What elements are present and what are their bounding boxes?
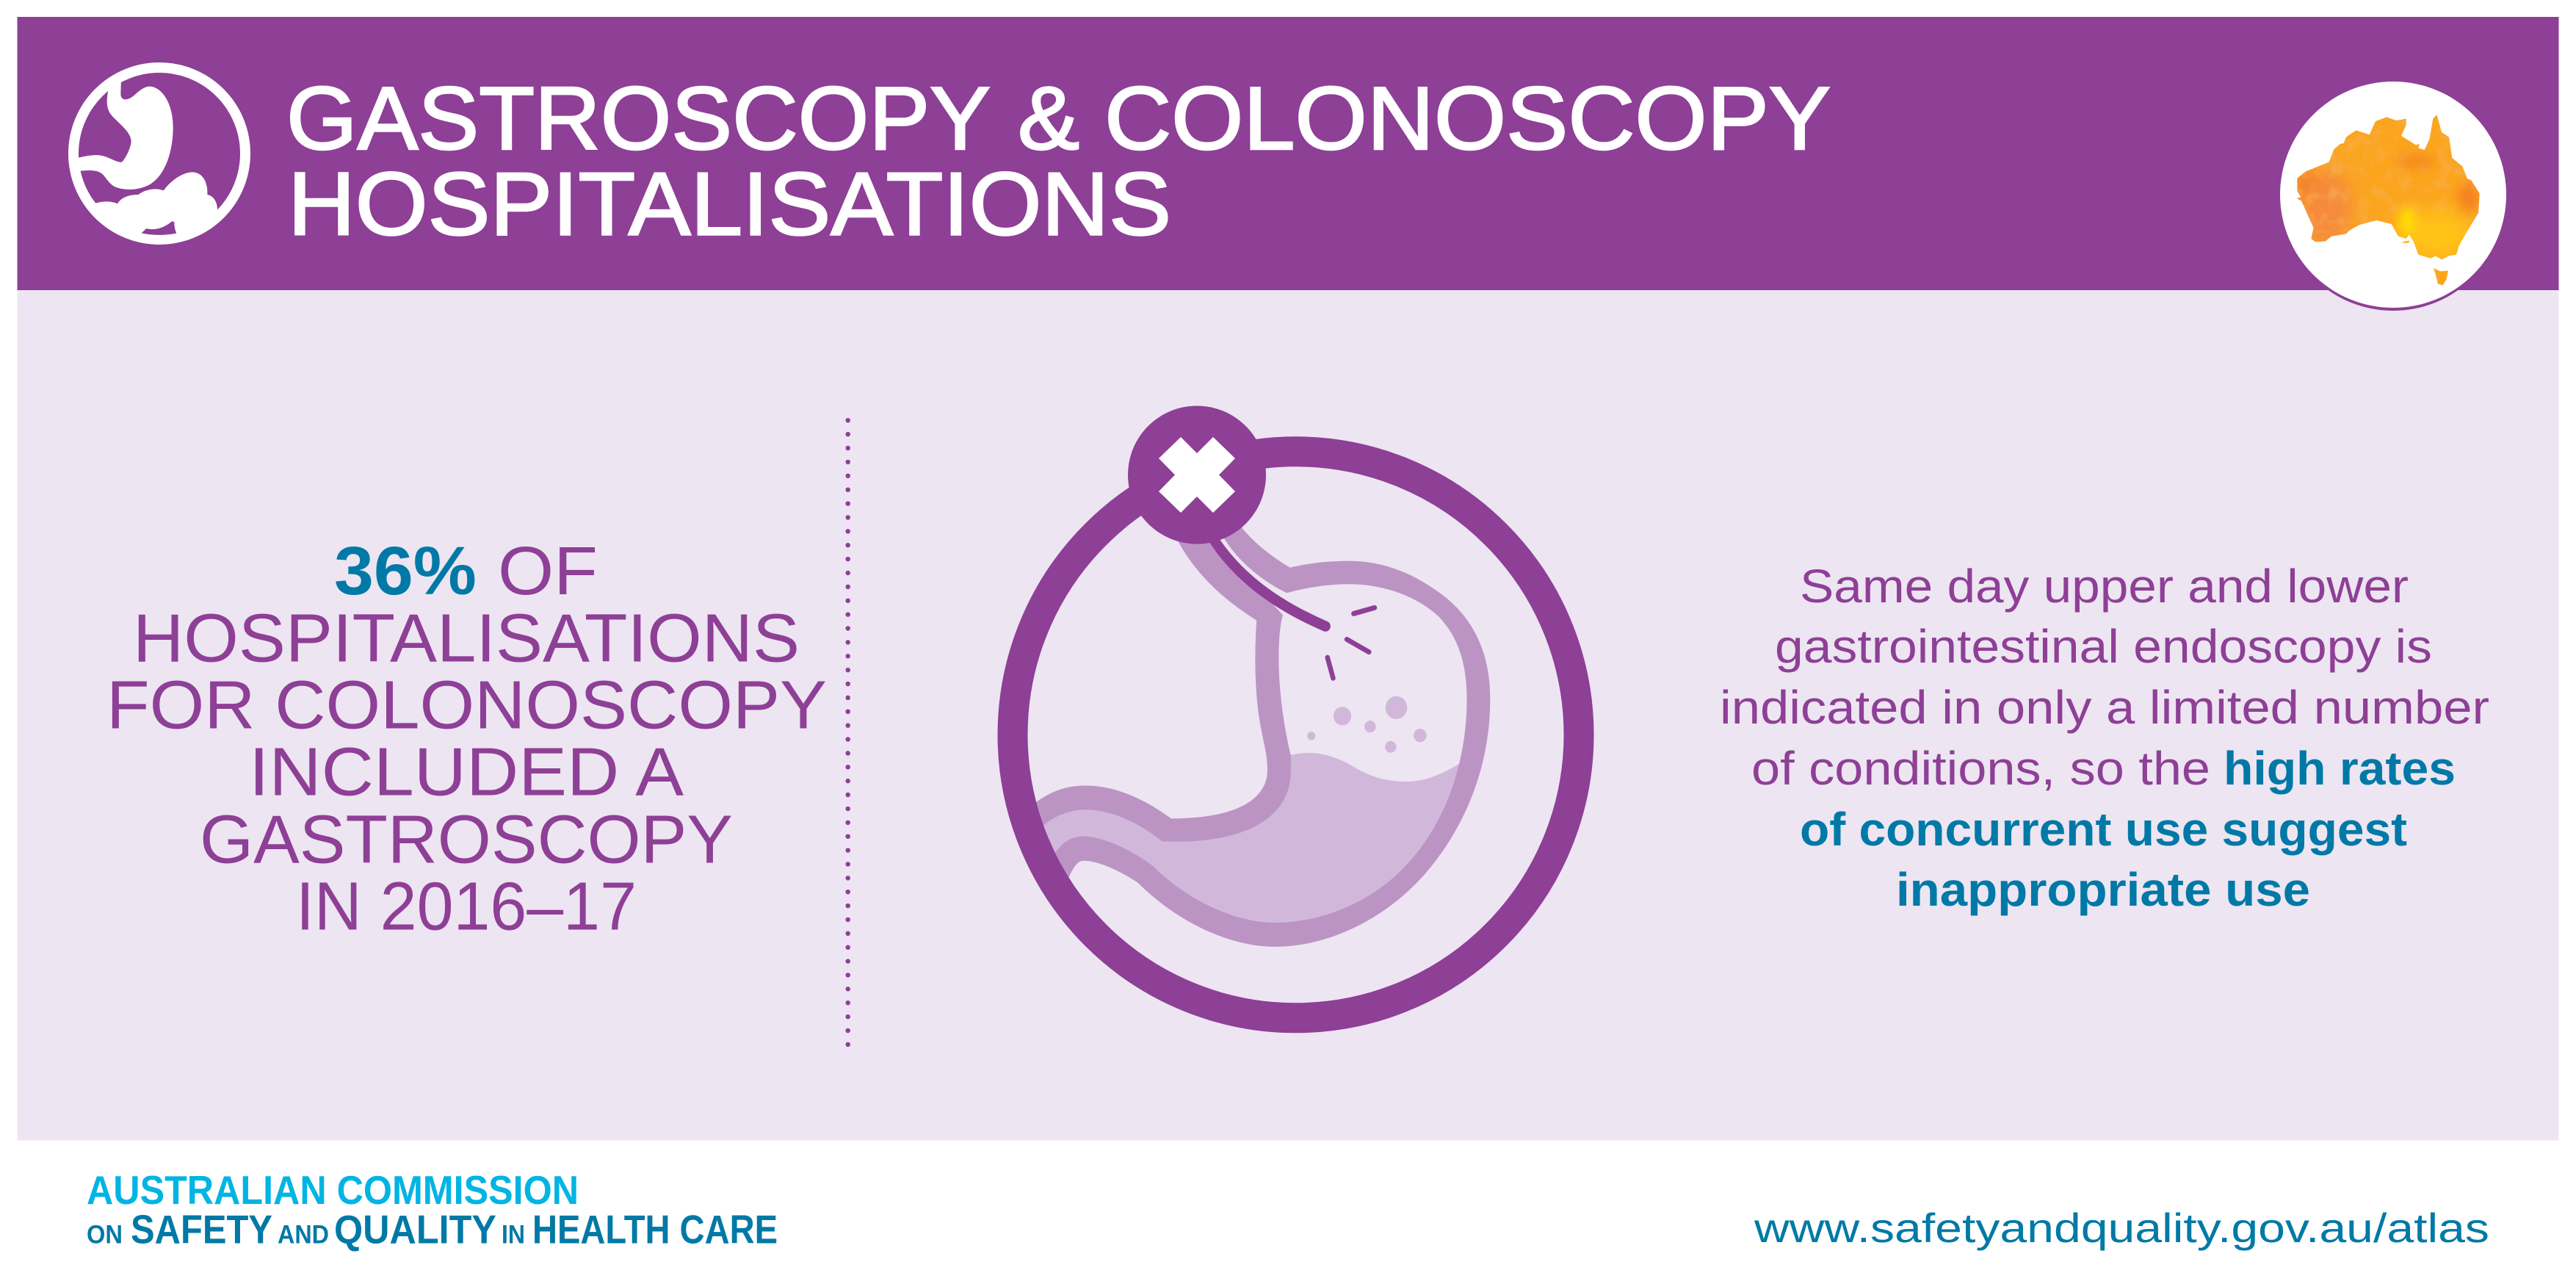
title: HOSPITALISATIONS xyxy=(288,154,1171,254)
explanatory text: inappropriate use xyxy=(1896,863,2310,916)
statistic text: 36% of hospitalisations: GASTROSCOPY xyxy=(200,801,733,877)
logo: Australian Commission on Safety and Quality in Health Care: ON xyxy=(87,1221,123,1249)
explanatory text: Same day upper and lower xyxy=(1800,560,2409,613)
stomach xyxy=(1017,516,1490,947)
explanatory text: high rates xyxy=(2224,742,2456,795)
logo: Australian Commission on Safety and Quality in Health Care: AND xyxy=(278,1221,329,1249)
logo: Australian Commission on Safety and Quality in Health Care xyxy=(87,1167,778,1252)
dotted vertical divider xyxy=(845,420,850,1045)
explanatory text: of conditions, so the xyxy=(1751,742,2210,795)
title xyxy=(286,68,1831,254)
illustration: stomach with endoscope inside ring xyxy=(1013,405,1579,1018)
logo: Australian Commission on Safety and Quality in Health Care: QUALITY xyxy=(334,1206,496,1252)
statistic text: 36% of hospitalisations: FOR COLONOSCOPY xyxy=(106,667,827,743)
statistic text: 36% of hospitalisations xyxy=(106,533,827,945)
logo: Australian Commission on Safety and Quality in Health Care: SAFETY xyxy=(131,1206,272,1252)
statistic text: 36% of hospitalisations: INCLUDED A xyxy=(249,733,684,809)
statistic text: 36% of hospitalisations: 36% xyxy=(334,533,477,609)
title: COLONOSCOPY xyxy=(1104,68,1831,168)
explanatory text: of concurrent use suggest xyxy=(1800,803,2407,856)
outer ring xyxy=(1013,452,1579,1018)
statistic text: 36% of hospitalisations: HOSPITALISATIONS xyxy=(133,599,800,676)
header band xyxy=(18,17,2558,290)
icon: Australia map in white circle xyxy=(2280,82,2506,311)
icon: stomach and intestine badge xyxy=(73,68,245,248)
title: & xyxy=(1018,68,1079,168)
logo: Australian Commission on Safety and Quality in Health Care: IN xyxy=(502,1221,525,1249)
statistic text: 36% of hospitalisations: OF xyxy=(498,533,598,609)
explanatory text xyxy=(1720,560,2489,916)
title: GASTROSCOPY xyxy=(286,68,991,168)
logo: Australian Commission on Safety and Quality in Health Care: AUSTRALIAN COMMISSION xyxy=(87,1167,579,1213)
explanatory text: indicated in only a limited number xyxy=(1720,681,2489,734)
icon: cross badge xyxy=(1128,405,1266,544)
logo: Australian Commission on Safety and Quality in Health Care: HEALTH CARE xyxy=(532,1206,778,1252)
website url: www.safetyandquality.gov.au/atlas xyxy=(1754,1205,2489,1251)
explanatory text: gastrointestinal endoscopy is xyxy=(1775,620,2432,673)
statistic text: 36% of hospitalisations: IN 2016–17 xyxy=(296,868,637,945)
